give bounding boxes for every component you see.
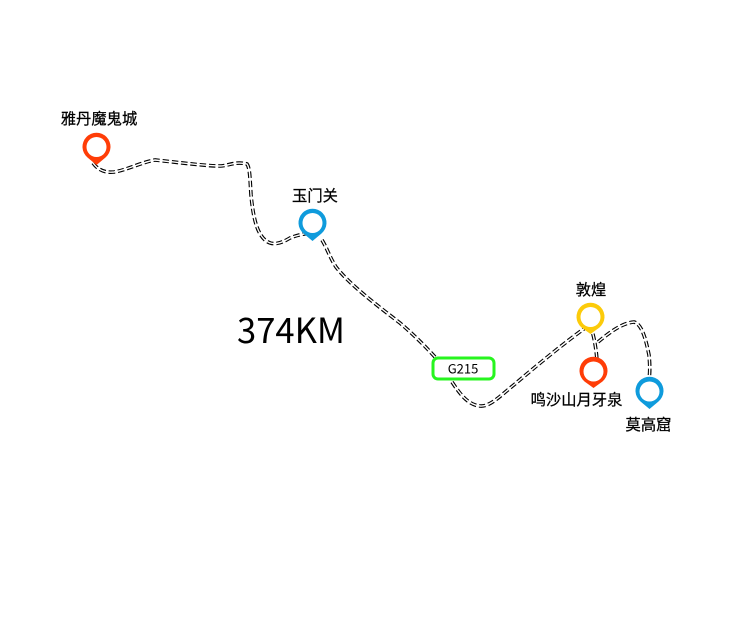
label: 玉门关: 玉门关: [292, 184, 338, 206]
label: 鸣沙山月牙泉: 鸣沙山月牙泉: [531, 388, 622, 410]
pin: 莫高窟: [636, 377, 664, 409]
label: 敦煌: 敦煌: [576, 278, 606, 300]
route: double dashed road: [93, 160, 650, 406]
label: 莫高窟: 莫高窟: [626, 413, 671, 435]
pin: 敦煌: [577, 303, 605, 334]
pin: 雅丹魔鬼城: [82, 133, 110, 165]
distance label: 374KM: [237, 303, 345, 354]
road badge: G215: [433, 358, 494, 379]
pin: 鸣沙山月牙泉: [580, 357, 608, 388]
pin: 玉门关: [298, 209, 326, 241]
label: 雅丹魔鬼城: 雅丹魔鬼城: [61, 107, 137, 129]
road badge: G215: G215: [448, 358, 478, 378]
